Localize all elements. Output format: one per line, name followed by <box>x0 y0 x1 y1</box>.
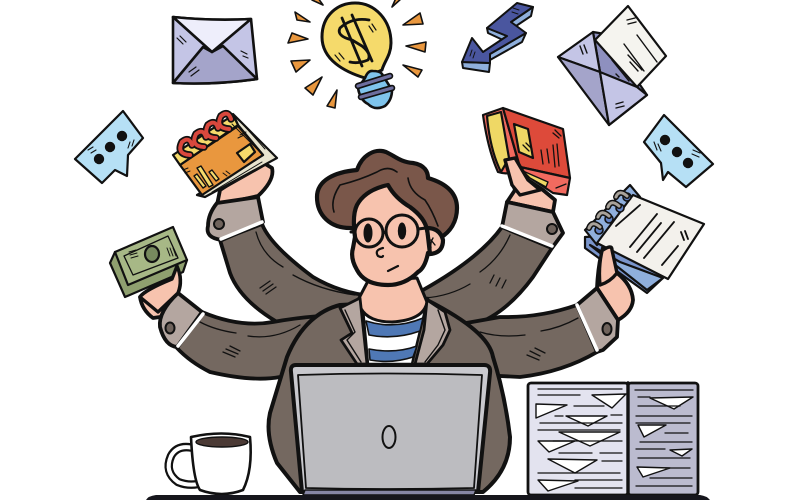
shirt <box>362 298 428 364</box>
icon: light bulb with dollar sign <box>322 3 392 108</box>
icon: calendar held in hand <box>173 114 277 197</box>
dots left <box>94 131 127 164</box>
coffee cup <box>169 434 251 494</box>
upper right arm <box>405 158 563 330</box>
icon: light rays <box>288 0 426 108</box>
icon: spiral notebook held in hand <box>585 185 704 293</box>
rings <box>180 114 231 155</box>
shirt stripes <box>366 318 423 361</box>
notebook rings <box>595 193 631 234</box>
head <box>317 151 457 285</box>
icon: chat bubble left <box>75 111 143 183</box>
icon: money stack in hand <box>110 227 187 312</box>
icon: closed envelope <box>173 17 257 84</box>
lower right arm <box>455 246 633 377</box>
icon: lightning arrow <box>462 3 533 72</box>
laptop logo <box>382 426 396 448</box>
lower left arm <box>140 266 340 379</box>
icon: chat bubble right <box>644 115 713 187</box>
eyes <box>364 222 406 242</box>
glasses <box>351 215 426 247</box>
open document <box>528 383 698 495</box>
white shards <box>536 394 693 491</box>
desk <box>146 495 710 500</box>
dots right <box>660 135 693 168</box>
upper left arm <box>208 162 380 330</box>
icon: red book held in hand <box>483 108 570 195</box>
right lapel <box>415 300 450 364</box>
fingers on money <box>140 266 180 312</box>
left lapel <box>340 298 367 364</box>
neck <box>358 278 427 322</box>
text lines <box>538 389 693 488</box>
icon: open envelope with letter <box>558 6 666 125</box>
nose and mouth <box>377 248 398 271</box>
fingers on book <box>505 158 540 195</box>
body <box>269 278 510 492</box>
laptop <box>291 365 490 495</box>
